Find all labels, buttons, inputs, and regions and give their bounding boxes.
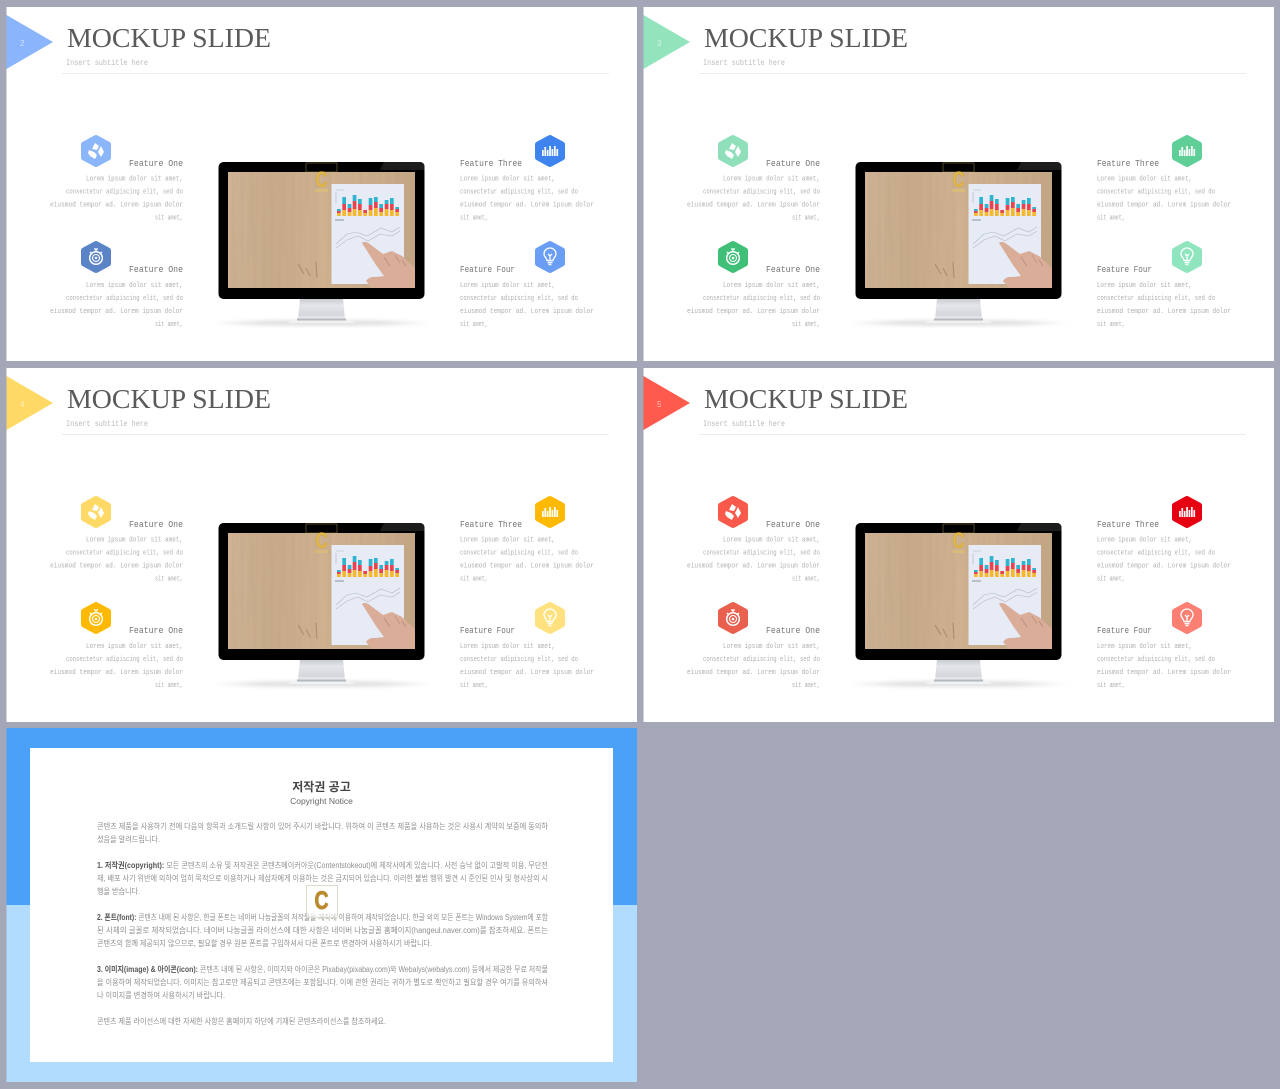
font paragraph: 된 사체의 글꼴로 제작되었습니다. 네이버 나눔글꼴 라이선스에 대한 사항은 네이버 나눔글꼴 홈페이지(hangeul.naver.com)를 참조하세요. 폰트는 bbox=[97, 925, 548, 935]
feature one: eiusmod tempor ad. Lorem ipsum dolor bbox=[50, 562, 183, 570]
feature one second: sit amet, bbox=[792, 682, 820, 690]
feature three bbox=[460, 138, 594, 222]
feature three: consectetur adipiscing elit, sed do bbox=[460, 550, 578, 558]
feature one second: consectetur adipiscing elit, sed do bbox=[703, 656, 820, 664]
heading: 저작권 공고 bbox=[292, 779, 351, 794]
title: MOCKUP SLIDE bbox=[704, 383, 908, 414]
feature one second: eiusmod tempor ad. Lorem ipsum dolor bbox=[687, 308, 820, 316]
subtitle: Insert subtitle here bbox=[703, 419, 785, 429]
feature three: sit amet, bbox=[460, 576, 488, 584]
feature three: Lorem ipsum dolor sit amet, bbox=[460, 536, 555, 544]
feature one: consectetur adipiscing elit, sed do bbox=[703, 188, 820, 196]
feature four: consectetur adipiscing elit, sed do bbox=[460, 656, 578, 664]
feature three: Lorem ipsum dolor sit amet, bbox=[460, 176, 555, 184]
feature three: eiusmod tempor ad. Lorem ipsum dolor bbox=[460, 202, 594, 210]
number triangle: 2 bbox=[20, 39, 25, 48]
feature three: Feature Three bbox=[1097, 519, 1159, 530]
feature three: Lorem ipsum dolor sit amet, bbox=[1097, 536, 1192, 544]
feature one second: consectetur adipiscing elit, sed do bbox=[66, 295, 183, 303]
number triangle bbox=[6, 376, 53, 430]
feature four: sit amet, bbox=[1097, 682, 1125, 690]
feature one second: Lorem ipsum dolor sit amet, bbox=[86, 282, 183, 290]
feature four: Lorem ipsum dolor sit amet, bbox=[1097, 643, 1192, 651]
feature one: Lorem ipsum dolor sit amet, bbox=[86, 176, 183, 184]
number triangle: 4 bbox=[20, 400, 25, 409]
feature four: eiusmod tempor ad. Lorem ipsum dolor bbox=[1097, 669, 1231, 677]
feature one: Lorem ipsum dolor sit amet, bbox=[86, 536, 183, 544]
feature three: consectetur adipiscing elit, sed do bbox=[1097, 550, 1215, 558]
feature four: consectetur adipiscing elit, sed do bbox=[460, 295, 578, 303]
number triangle: 5 bbox=[657, 400, 662, 409]
feature one: eiusmod tempor ad. Lorem ipsum dolor bbox=[50, 202, 183, 210]
panel: blue mockup slide bbox=[6, 7, 637, 361]
feature four bbox=[1097, 244, 1231, 329]
feature three: consectetur adipiscing elit, sed do bbox=[1097, 188, 1215, 196]
number triangle bbox=[644, 376, 690, 430]
feature one: consectetur adipiscing elit, sed do bbox=[66, 550, 183, 558]
copyright paragraph: 행을 받습니다. bbox=[97, 886, 140, 896]
feature one: eiusmod tempor ad. Lorem ipsum dolor bbox=[687, 202, 820, 210]
intro paragraph: 콘텐츠 제품을 사용하기 전에 다음의 항목과 소개드릴 사항이 있어 주시기 바랍니다. 위하여 이 콘텐츠 제품을 사용하는 것은 사용시 계약의 보증에 동의하 bbox=[97, 821, 548, 831]
image and icon paragraph bbox=[97, 964, 548, 1000]
feature three: eiusmod tempor ad. Lorem ipsum dolor bbox=[460, 562, 594, 570]
feature one bbox=[50, 138, 183, 222]
copyright paragraph: 1. 저작권(copyright): 모든 콘텐츠의 소유 및 저작권은 콘텐츠메이커아웃(Contentstokeout)에 제작사에게 있습니다. 사전 승낙 없이 고발적 이용, 무단전 bbox=[97, 860, 548, 870]
feature four bbox=[460, 244, 594, 329]
copyright paragraph bbox=[97, 860, 548, 896]
feature one bbox=[50, 499, 183, 584]
feature one second: Lorem ipsum dolor sit amet, bbox=[723, 643, 820, 651]
feature one second: sit amet, bbox=[155, 682, 183, 690]
feature one: sit amet, bbox=[792, 214, 820, 222]
feature four: eiusmod tempor ad. Lorem ipsum dolor bbox=[1097, 308, 1231, 316]
feature one: consectetur adipiscing elit, sed do bbox=[703, 550, 820, 558]
feature four: Lorem ipsum dolor sit amet, bbox=[1097, 282, 1192, 290]
font paragraph: 2. 폰트(font): 콘텐츠 내에 된 사항은, 한글 폰트는 네이버 나눔글꼴의 저작물을 제작에 이용하여 제작되었습니다. 한글 외의 모든 폰트는 Windows System에 포함 bbox=[97, 912, 548, 922]
feature four: sit amet, bbox=[460, 682, 488, 690]
feature four: eiusmod tempor ad. Lorem ipsum dolor bbox=[460, 308, 594, 316]
monitor: C bbox=[316, 528, 328, 553]
number triangle: 3 bbox=[657, 39, 662, 48]
title: MOCKUP SLIDE bbox=[704, 22, 908, 53]
feature one: Lorem ipsum dolor sit amet, bbox=[723, 176, 820, 184]
feature one second: sit amet, bbox=[155, 321, 183, 329]
font paragraph: 콘텐츠의 함께 제공되지 않으므로, 필요할 경우 원본 폰트를 구입하셔서 다른 폰트로 변경하여 사용하시기 바랍니다. bbox=[97, 938, 432, 948]
feature four: sit amet, bbox=[1097, 321, 1125, 329]
feature one: Feature One bbox=[766, 158, 820, 169]
feature three: eiusmod tempor ad. Lorem ipsum dolor bbox=[1097, 202, 1231, 210]
feature one: sit amet, bbox=[155, 576, 183, 584]
feature one: consectetur adipiscing elit, sed do bbox=[66, 188, 183, 196]
feature one second bbox=[687, 244, 820, 329]
monitor: C bbox=[952, 528, 965, 553]
monitor: C bbox=[316, 167, 328, 192]
feature one second bbox=[50, 244, 183, 329]
feature one second: Feature One bbox=[129, 625, 183, 636]
feature four: Lorem ipsum dolor sit amet, bbox=[460, 282, 555, 290]
title: MOCKUP SLIDE bbox=[67, 22, 271, 53]
number triangle bbox=[644, 15, 690, 69]
monitor: C bbox=[952, 167, 965, 192]
subtitle: Insert subtitle here bbox=[66, 58, 148, 68]
monitor bbox=[209, 523, 435, 687]
font paragraph bbox=[97, 912, 548, 948]
feature three: Feature Three bbox=[460, 519, 522, 530]
subtitle: Insert subtitle here bbox=[66, 419, 148, 429]
feature one bbox=[687, 138, 820, 222]
feature one: Feature One bbox=[129, 519, 183, 530]
watermark logo bbox=[306, 886, 338, 918]
feature three: eiusmod tempor ad. Lorem ipsum dolor bbox=[1097, 562, 1231, 570]
feature three: Feature Three bbox=[1097, 158, 1159, 169]
feature three: Lorem ipsum dolor sit amet, bbox=[1097, 176, 1192, 184]
subtitle: Insert subtitle here bbox=[703, 58, 785, 68]
feature one: sit amet, bbox=[155, 214, 183, 222]
feature four: Feature Four bbox=[1097, 625, 1152, 636]
feature one second: eiusmod tempor ad. Lorem ipsum dolor bbox=[50, 308, 183, 316]
watermark logo: C bbox=[314, 887, 328, 915]
feature one: Feature One bbox=[129, 158, 183, 169]
panel: yellow mockup slide bbox=[6, 368, 637, 722]
copyright paragraph: 재, 배포 사기 위반에 의하여 엄히 목적으로 이용하거나 제삼자에게 이용하는 것은 금지되어 있습니다. 이러한 불법 행위 발견 시 준인된 민사 및 형사상의 시 bbox=[97, 873, 548, 883]
intro paragraph: 셨음을 알려드립니다. bbox=[97, 834, 160, 844]
feature one bbox=[687, 499, 820, 584]
feature four bbox=[460, 605, 594, 690]
feature one second: Lorem ipsum dolor sit amet, bbox=[723, 282, 820, 290]
feature one second: eiusmod tempor ad. Lorem ipsum dolor bbox=[50, 669, 183, 677]
monitor bbox=[846, 523, 1072, 687]
monitor bbox=[209, 162, 435, 326]
closing line: 콘텐츠 제품 라이선스에 대한 자세한 사항은 홈페이지 하단에 기재된 콘텐츠라이선스를 참조하세요. bbox=[97, 1016, 386, 1026]
feature four: consectetur adipiscing elit, sed do bbox=[1097, 295, 1215, 303]
panel: green mockup slide bbox=[644, 7, 1274, 361]
image and icon paragraph: 나 이미지를 변경하여 사용하시기 바랍니다. bbox=[97, 990, 225, 1000]
feature four bbox=[1097, 605, 1231, 690]
feature one second: Lorem ipsum dolor sit amet, bbox=[86, 643, 183, 651]
feature one second bbox=[50, 605, 183, 690]
subheading: Copyright Notice bbox=[290, 796, 353, 806]
monitor bbox=[846, 162, 1072, 326]
feature four: sit amet, bbox=[460, 321, 488, 329]
title: MOCKUP SLIDE bbox=[67, 383, 271, 414]
feature one: Lorem ipsum dolor sit amet, bbox=[723, 536, 820, 544]
feature one: eiusmod tempor ad. Lorem ipsum dolor bbox=[687, 562, 820, 570]
feature three: sit amet, bbox=[1097, 214, 1125, 222]
feature one second: Feature One bbox=[766, 625, 820, 636]
intro paragraph bbox=[97, 821, 548, 844]
feature three: Feature Three bbox=[460, 158, 522, 169]
feature three: sit amet, bbox=[1097, 576, 1125, 584]
feature one: Feature One bbox=[766, 519, 820, 530]
feature three: sit amet, bbox=[460, 214, 488, 222]
feature four: Feature Four bbox=[460, 264, 515, 275]
feature one: sit amet, bbox=[792, 576, 820, 584]
feature one second: consectetur adipiscing elit, sed do bbox=[66, 656, 183, 664]
panel: red mockup slide bbox=[644, 368, 1274, 722]
panel: copyright notice bbox=[6, 728, 637, 1082]
feature one second: eiusmod tempor ad. Lorem ipsum dolor bbox=[687, 669, 820, 677]
feature one second: consectetur adipiscing elit, sed do bbox=[703, 295, 820, 303]
feature four: eiusmod tempor ad. Lorem ipsum dolor bbox=[460, 669, 594, 677]
feature three bbox=[1097, 499, 1231, 584]
feature three: consectetur adipiscing elit, sed do bbox=[460, 188, 578, 196]
feature four: consectetur adipiscing elit, sed do bbox=[1097, 656, 1215, 664]
feature one second: Feature One bbox=[129, 264, 183, 275]
image and icon paragraph: 3. 이미지(image) & 아이콘(icon): 콘텐츠 내에 된 사항은, 이미지와 아이콘은 Pixabay(pixabay.com)와 Webalys(webalys.com) 등에서 제공한 무료 저작물 bbox=[97, 964, 548, 974]
feature four: Lorem ipsum dolor sit amet, bbox=[460, 643, 555, 651]
number triangle bbox=[6, 15, 53, 69]
feature three bbox=[1097, 138, 1231, 222]
image and icon paragraph: 을 이용하여 제작되었습니다. 이미지는 참고로만 제공되고 콘텐츠에는 포함됩니다. 이에 관한 권리는 귀하가 별도로 확인하고 필요할 경우 여기를 유의하셔 bbox=[97, 977, 548, 987]
feature four: Feature Four bbox=[1097, 264, 1152, 275]
feature one second bbox=[687, 605, 820, 690]
feature four: Feature Four bbox=[460, 625, 515, 636]
feature one second: sit amet, bbox=[792, 321, 820, 329]
feature one second: Feature One bbox=[766, 264, 820, 275]
feature three bbox=[460, 499, 594, 584]
